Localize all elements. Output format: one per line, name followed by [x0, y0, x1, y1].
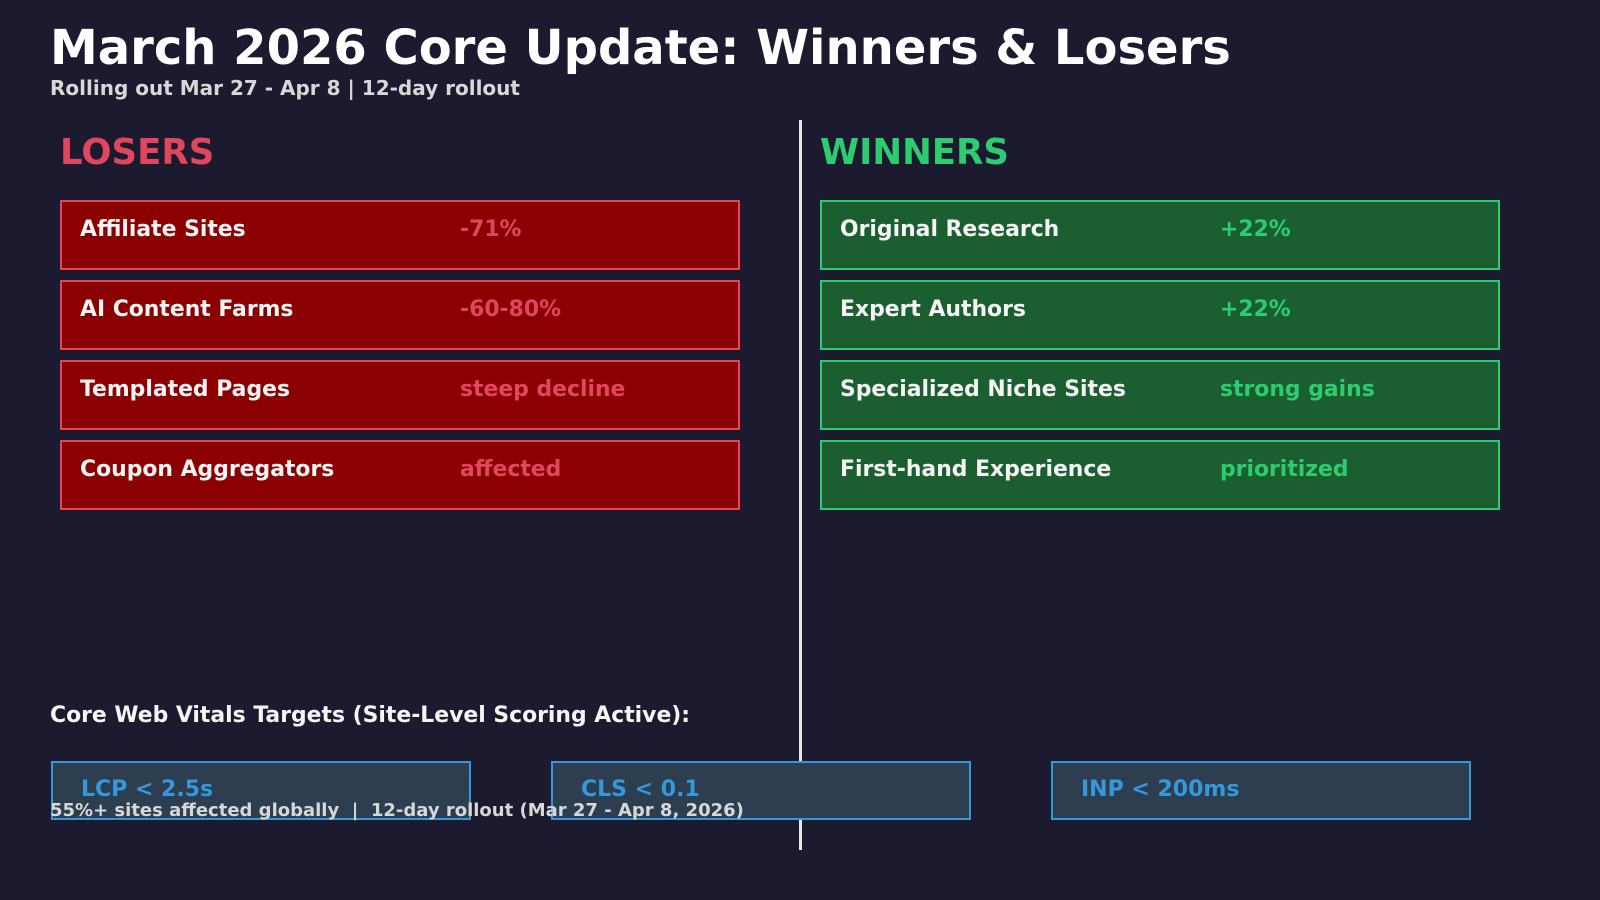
cwv: INP: INP < 200ms — [1081, 777, 1239, 802]
winner: expert: +22% — [1220, 297, 1291, 322]
cwv: CLS — [551, 761, 971, 820]
loser: templated: Templated Pages — [80, 377, 290, 402]
loser: affiliate — [60, 200, 740, 270]
loser: coupon — [60, 440, 740, 510]
winner: first-hand — [820, 440, 1500, 510]
cwv: CLS: CLS < 0.1 — [581, 777, 700, 802]
heading: winners: WINNERS — [820, 132, 1009, 173]
loser: affiliate: -71% — [460, 217, 521, 242]
loser: ai farms: AI Content Farms — [80, 297, 293, 322]
winner: research: Original Research — [840, 217, 1059, 242]
loser: templated: steep decline — [460, 377, 625, 402]
loser: ai farms — [60, 280, 740, 350]
cwv: LCP: LCP < 2.5s — [81, 777, 213, 802]
winner: research — [820, 200, 1500, 270]
winner: research: +22% — [1220, 217, 1291, 242]
title: March 2026 Core Update: Winners & Losers — [50, 20, 1231, 76]
loser: affiliate: Affiliate Sites — [80, 217, 246, 242]
cwv heading: Core Web Vitals Targets (Site-Level Scoring Active): — [50, 703, 690, 728]
subtitle: Rolling out Mar 27 - Apr 8 | 12-day rollout — [50, 76, 520, 100]
loser: coupon: affected — [460, 457, 561, 482]
cwv: LCP — [51, 761, 471, 820]
loser: ai farms: -60-80% — [460, 297, 561, 322]
winner: expert — [820, 280, 1500, 350]
winner: first-hand: prioritized — [1220, 457, 1349, 482]
loser: coupon: Coupon Aggregators — [80, 457, 334, 482]
winner: niche — [820, 360, 1500, 430]
divider — [799, 120, 802, 850]
footer: 55%+ sites affected globally | 12-day rollout (Mar 27 - Apr 8, 2026) — [50, 800, 744, 821]
loser: templated — [60, 360, 740, 430]
cwv: INP — [1051, 761, 1471, 820]
winner: first-hand: First-hand Experience — [840, 457, 1111, 482]
winner: niche: strong gains — [1220, 377, 1375, 402]
winner: expert: Expert Authors — [840, 297, 1026, 322]
heading: losers: LOSERS — [60, 132, 214, 173]
winner: niche: Specialized Niche Sites — [840, 377, 1126, 402]
